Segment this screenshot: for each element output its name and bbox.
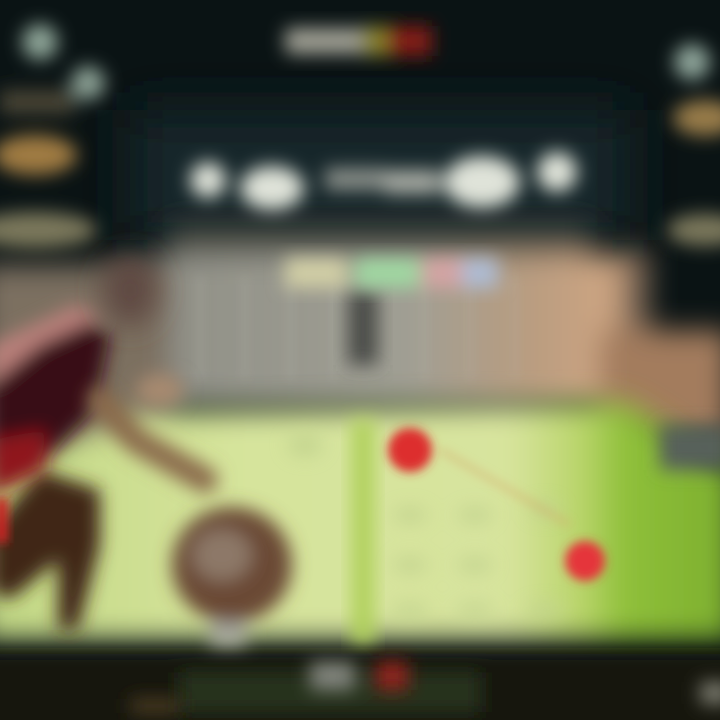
field: green pitch	[0, 402, 720, 640]
bottom labels: blurred score tags	[130, 662, 720, 714]
ball: brown football	[172, 507, 292, 646]
pitch line: vertical stripe	[352, 420, 374, 645]
player raised hand	[136, 374, 184, 406]
pitch marks: faint dotted route	[287, 433, 565, 617]
top banner: scoreboard blur	[285, 26, 432, 56]
grid: faint stand columns	[200, 275, 515, 380]
figure: distant dark figure in stands	[348, 290, 378, 365]
stands: mid-level crowd wall	[0, 225, 720, 465]
upper glow: teal haze behind heading	[130, 110, 630, 240]
subtitle: colored legend strip	[285, 258, 498, 288]
marker: red dot upper	[388, 428, 432, 472]
band: dark bottom strip	[0, 654, 720, 720]
marker: red dot lower	[565, 541, 605, 581]
title: blurred white heading	[190, 152, 577, 210]
player accent	[0, 498, 8, 543]
left balconies: stadium lights and tiers	[0, 24, 105, 248]
player torso	[0, 305, 110, 495]
player arm	[100, 400, 205, 480]
player: kneeling figure in red	[0, 254, 205, 630]
player head	[102, 254, 158, 326]
arrow: faint red path between markers	[440, 450, 570, 525]
right balconies: stadium lights and tiers	[660, 44, 720, 470]
player legs	[0, 470, 100, 630]
